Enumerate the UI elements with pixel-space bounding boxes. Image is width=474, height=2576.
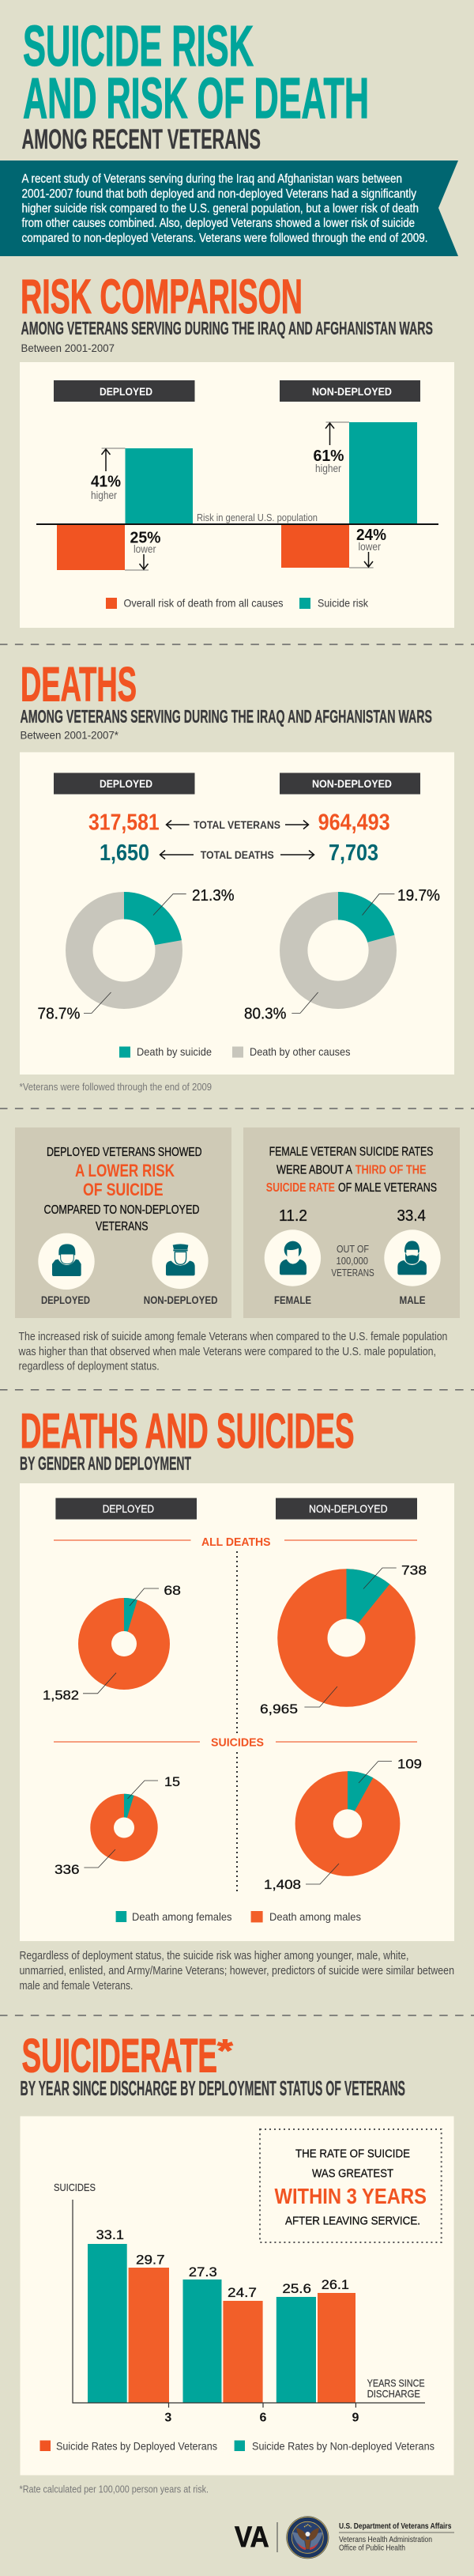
bar chart: 24.7 bbox=[228, 2286, 257, 2300]
bar chart: YEARS SINCE bbox=[367, 2377, 425, 2389]
tag: non-deployed bbox=[280, 380, 420, 402]
callout: 25% lower: 25% bbox=[130, 530, 161, 547]
pie: deployed all deaths: 1,582 bbox=[43, 1688, 79, 1703]
bar chart: 6 bbox=[260, 2412, 267, 2425]
bar: non-deployed suicide risk bbox=[349, 422, 417, 524]
heading: deaths bbox=[21, 657, 432, 742]
panel: female vs male suicide rates: OF MALE VETERANS bbox=[338, 1181, 437, 1195]
tag: deployed: DEPLOYED bbox=[100, 777, 152, 790]
callout: 24% lower: 24% bbox=[356, 527, 386, 544]
baseline axis bbox=[36, 523, 438, 525]
intro banner: higher suicide risk compared to the U.S. general population, but a lower risk of death bbox=[22, 202, 419, 216]
legend: Death among females bbox=[132, 1910, 232, 1923]
stat: total deaths: TOTAL DEATHS bbox=[201, 848, 274, 861]
panel: deaths bbox=[20, 752, 454, 1075]
callout: within 3 years: THE RATE OF SUICIDE bbox=[295, 2147, 410, 2161]
pie: deployed suicides: 15 bbox=[164, 1774, 180, 1789]
legend: Suicide Rates by Non-deployed Veterans bbox=[252, 2439, 434, 2452]
bar: deployed death risk bbox=[57, 525, 125, 570]
stat: total deaths: 7,703 bbox=[329, 840, 378, 866]
intro banner: A recent study of Veterans serving during the Iraq and Afghanistan wars between bbox=[22, 172, 402, 186]
callout: 61% higher: 61% bbox=[313, 448, 344, 465]
bar chart: SUICIDES bbox=[54, 2181, 96, 2193]
label: out of 100,000 veterans: VETERANS bbox=[331, 1267, 374, 1279]
divider heading: suicides: SUICIDES bbox=[211, 1736, 264, 1749]
bar chart: 27.3 bbox=[189, 2265, 217, 2279]
heading: suicide rate: SUICIDERATE bbox=[22, 2029, 217, 2082]
tag: non-deployed: NON-DEPLOYED bbox=[312, 777, 392, 790]
stat: total veterans bbox=[88, 810, 390, 836]
callout: 24% lower bbox=[349, 527, 386, 568]
tag: non-deployed bbox=[276, 1498, 417, 1520]
stat: total deaths: 1,650 bbox=[100, 840, 149, 866]
label: deployed: DEPLOYED bbox=[41, 1294, 90, 1306]
donut: non-deployed bbox=[244, 887, 440, 1023]
heading: risk comparison bbox=[21, 270, 433, 354]
text block: predictors of suicide bbox=[19, 1950, 454, 1992]
legend: Suicide Rates by Deployed Veterans bbox=[56, 2439, 217, 2452]
text block: female vs male comparison: regardless of deployment status. bbox=[19, 1361, 160, 1373]
pie: non-deployed all deaths: 738 bbox=[401, 1563, 427, 1578]
heading: deaths and suicides: BY GENDER AND DEPLOYMENT bbox=[20, 1453, 191, 1475]
pie: non-deployed suicides: 1,408 bbox=[264, 1877, 301, 1892]
bar chart: 25.6 bbox=[282, 2282, 311, 2296]
pie: deployed all deaths bbox=[43, 1583, 181, 1703]
label: out of 100,000 veterans: 100,000 bbox=[337, 1255, 368, 1267]
legend: Death by suicide bbox=[137, 1045, 212, 1058]
callout: a lower risk of suicide: A LOWER RISK bbox=[75, 1161, 175, 1180]
callout: 41% higher: higher bbox=[91, 489, 117, 501]
tag: non-deployed: NON-DEPLOYED bbox=[312, 385, 392, 398]
title: AMONG RECENT VETERANS bbox=[22, 124, 261, 155]
title: SUICIDE RISK bbox=[23, 14, 254, 78]
icon: non-deployed soldier bbox=[152, 1233, 209, 1289]
panel: female vs male suicide rates: WERE ABOUT A bbox=[276, 1164, 353, 1177]
text: department name bbox=[339, 2521, 454, 2552]
panel: deaths and suicides bbox=[20, 1483, 454, 1941]
label: female: FEMALE bbox=[274, 1294, 311, 1306]
tag: deployed bbox=[54, 380, 194, 402]
footnote: rate: *Rate calculated per 100,000 person years at risk. bbox=[19, 2483, 209, 2495]
panel: risk comparison bbox=[20, 362, 454, 628]
divider: logo bbox=[276, 2522, 278, 2552]
callout: 24% lower: lower bbox=[359, 540, 381, 553]
callout: 41% higher bbox=[91, 448, 125, 501]
icon: male bbox=[384, 1229, 441, 1286]
pie: non-deployed suicides bbox=[264, 1757, 422, 1892]
heading: deaths and suicides bbox=[20, 1404, 354, 1475]
text: department name: Office of Public Health bbox=[339, 2543, 405, 2552]
heading: risk comparison: RISK COMPARISON bbox=[21, 270, 303, 323]
legend: Suicide risk bbox=[318, 597, 369, 610]
stat: male rate: 33.4 bbox=[397, 1207, 426, 1225]
tag: deployed bbox=[54, 773, 194, 794]
heading: suicide rate bbox=[21, 2029, 405, 2100]
pie: deployed suicides bbox=[55, 1774, 180, 1877]
callout: 61% higher bbox=[313, 422, 349, 474]
bar chart: 29.7 bbox=[136, 2253, 165, 2268]
panel: female vs male suicide rates bbox=[243, 1127, 460, 1318]
pie: non-deployed all deaths: 6,965 bbox=[260, 1702, 298, 1717]
callout: 25% lower: lower bbox=[134, 542, 156, 555]
icon: female bbox=[265, 1229, 321, 1286]
donut: deployed bbox=[38, 887, 235, 1023]
stat: total veterans: TOTAL VETERANS bbox=[194, 818, 280, 831]
logo: VA: VA bbox=[235, 2521, 269, 2553]
donut: deployed: 78.7% bbox=[38, 1006, 81, 1023]
icon: VA seal bbox=[286, 2516, 329, 2559]
pie: non-deployed suicides: 109 bbox=[397, 1757, 422, 1772]
divider heading: all deaths: ALL DEATHS bbox=[201, 1535, 270, 1549]
donut: deployed: 21.3% bbox=[192, 887, 235, 905]
panel: lower risk of suicide: DEPLOYED VETERANS SHOWED bbox=[47, 1146, 202, 1159]
panel: female vs male suicide rates: THIRD OF THE bbox=[356, 1164, 427, 1177]
donut: non-deployed: 80.3% bbox=[244, 1006, 287, 1023]
text block: predictors of suicide: Regardless of deployment status, the suicide risk was higher among younger, male, white, bbox=[19, 1950, 408, 1962]
callout: a lower risk of suicide: OF SUICIDE bbox=[83, 1180, 164, 1199]
label: non-deployed: NON-DEPLOYED bbox=[144, 1294, 218, 1306]
legend: Death by other causes bbox=[250, 1045, 351, 1058]
stat: total veterans: 964,493 bbox=[318, 810, 390, 836]
intro banner bbox=[0, 161, 458, 256]
text: department name: Veterans Health Administration bbox=[339, 2535, 432, 2544]
intro banner: from other causes combined. Also, deployed Veterans showed a lower risk of suicide bbox=[22, 217, 415, 230]
bar chart bbox=[54, 2181, 425, 2425]
tag: deployed bbox=[55, 1498, 197, 1520]
legend bbox=[116, 1910, 361, 1923]
pie: deployed all deaths: 68 bbox=[164, 1583, 181, 1598]
callout: within 3 years: WAS GREATEST bbox=[312, 2166, 393, 2181]
stat: female rate: 11.2 bbox=[279, 1207, 307, 1225]
panel: suicide rate bbox=[21, 2116, 453, 2475]
tag: deployed: DEPLOYED bbox=[100, 385, 152, 398]
bar: non-deployed death risk bbox=[281, 525, 349, 568]
callout: a lower risk of suicide bbox=[75, 1161, 175, 1199]
label: general population: Risk in general U.S. population bbox=[197, 512, 318, 523]
heading: risk comparison: Between 2001-2007 bbox=[21, 342, 115, 354]
callout: within 3 years bbox=[260, 2129, 442, 2242]
title bbox=[22, 14, 369, 155]
panel: lower risk of suicide bbox=[15, 1127, 231, 1318]
panel: female vs male suicide rates: SUICIDE RATE bbox=[266, 1181, 335, 1195]
label: out of 100,000 veterans bbox=[331, 1243, 374, 1279]
heading: deaths: DEATHS bbox=[21, 657, 137, 711]
heading: deaths: Between 2001-2007* bbox=[21, 729, 119, 742]
tag: non-deployed bbox=[280, 773, 420, 794]
heading: suicide rate: * bbox=[217, 2034, 233, 2068]
panel: female vs male suicide rates: FEMALE VETERAN SUICIDE RATES bbox=[269, 1146, 433, 1159]
callout: 41% higher: 41% bbox=[91, 474, 121, 491]
label: out of 100,000 veterans: OUT OF bbox=[337, 1243, 369, 1255]
callout: within 3 years: WITHIN 3 YEARS bbox=[275, 2184, 427, 2208]
pie: deployed suicides: 336 bbox=[55, 1862, 80, 1877]
footnote: deaths: *Veterans were followed through the end of 2009 bbox=[19, 1081, 212, 1093]
callout: within 3 years: AFTER LEAVING SERVICE. bbox=[285, 2214, 420, 2228]
text block: predictors of suicide: male and female Veterans. bbox=[19, 1980, 133, 1992]
intro banner: 2001-2007 found that both deployed and non-deployed Veterans had a significantly bbox=[22, 187, 416, 201]
tag: non-deployed: NON-DEPLOYED bbox=[309, 1502, 388, 1515]
icon: deployed soldier bbox=[38, 1233, 95, 1290]
callout: 25% lower bbox=[125, 530, 161, 570]
text block: female vs male comparison bbox=[18, 1331, 447, 1373]
tag: deployed: DEPLOYED bbox=[103, 1502, 154, 1515]
stat: total veterans: 317,581 bbox=[88, 810, 160, 836]
bar chart: 3 bbox=[164, 2412, 171, 2425]
callout: 61% higher: higher bbox=[315, 462, 341, 474]
bar: deployed suicide risk bbox=[125, 448, 193, 524]
panel: lower risk of suicide: VETERANS bbox=[96, 1220, 149, 1233]
pie: non-deployed all deaths bbox=[260, 1563, 427, 1717]
panel: lower risk of suicide: COMPARED TO NON-DEPLOYED bbox=[44, 1203, 199, 1217]
bar chart: DISCHARGE bbox=[367, 2388, 420, 2400]
bar chart: 26.1 bbox=[322, 2278, 349, 2292]
legend: Death among males bbox=[269, 1910, 361, 1923]
legend bbox=[40, 2439, 434, 2452]
bar chart: 9 bbox=[352, 2412, 359, 2425]
stat: total deaths bbox=[100, 840, 378, 866]
donut: non-deployed: 19.7% bbox=[397, 887, 440, 905]
label: male: MALE bbox=[400, 1294, 425, 1306]
legend: Overall risk of death from all causes bbox=[123, 597, 283, 610]
legend bbox=[119, 1045, 351, 1058]
legend bbox=[106, 597, 369, 610]
bar chart: 33.1 bbox=[96, 2228, 124, 2242]
